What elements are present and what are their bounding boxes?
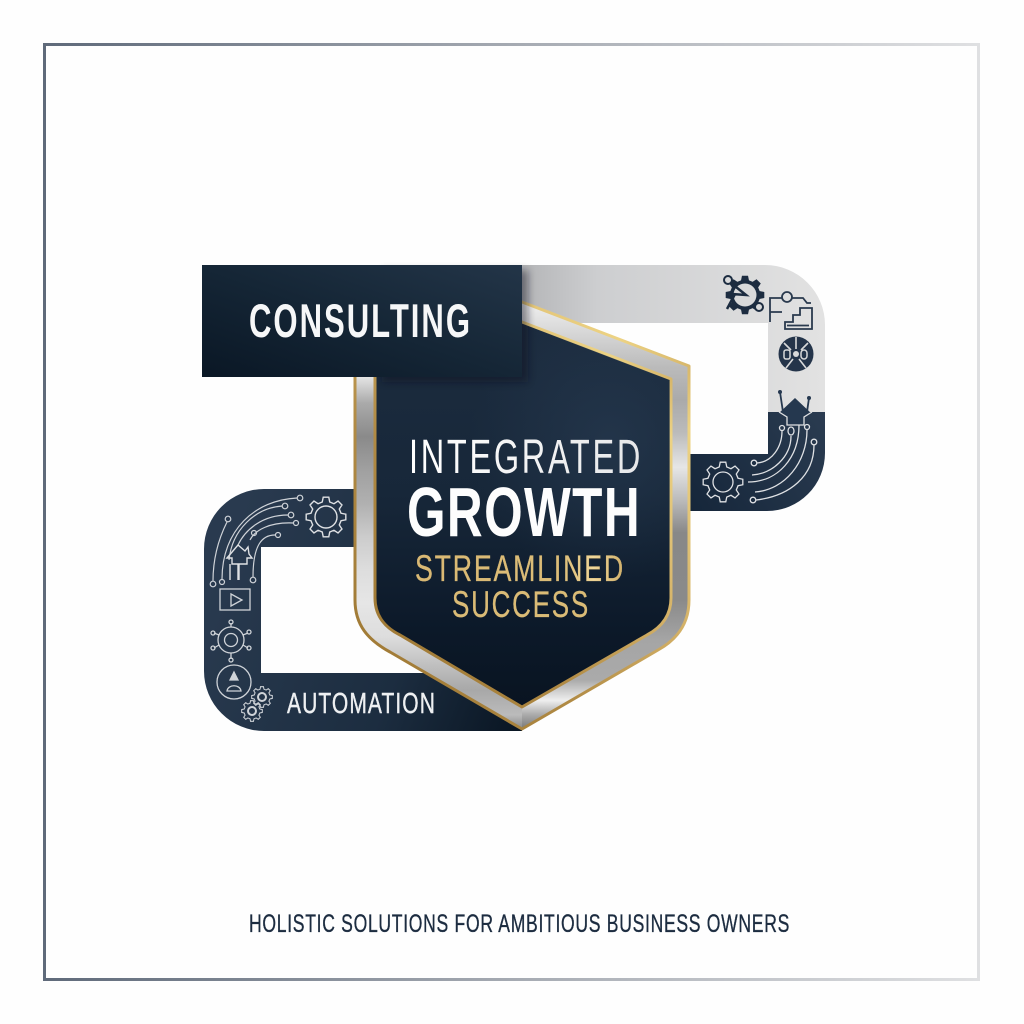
ribbon shape — [204, 489, 522, 731]
shield left silver bevel — [355, 300, 522, 729]
panel: top-right ribbon — [522, 265, 825, 511]
panel: bottom-left ribbon — [204, 489, 522, 731]
panel: consulting box — [202, 265, 528, 382]
icon: small gears — [242, 687, 272, 721]
ribbon section: navy — [680, 412, 825, 511]
shield badge — [355, 300, 689, 729]
icon: outlined gear right — [703, 462, 743, 502]
icon: circuit lines — [748, 424, 817, 503]
icon: growth arrow with circuit pins — [778, 390, 812, 425]
heading: growth: GROWTH — [407, 473, 641, 551]
icon: outlined gear left — [306, 497, 346, 537]
subheading: streamlined: STREAMLINED — [415, 548, 625, 589]
footer tagline: HOLISTIC SOLUTIONS FOR AMBITIOUS BUSINESS OWNERS — [249, 910, 790, 938]
icon: person in circle — [217, 665, 251, 699]
label: consulting: CONSULTING — [249, 294, 472, 347]
icon: dark gear with linked nodes — [724, 276, 764, 314]
icon: dark segmented circle — [778, 336, 814, 372]
subheading: success: SUCCESS — [452, 584, 590, 625]
box — [202, 265, 522, 377]
icon: hub with spokes — [211, 620, 251, 662]
label: automation: AUTOMATION — [287, 688, 436, 720]
heading: integrated: INTEGRATED — [409, 431, 643, 484]
icon: circuit lines left — [210, 495, 303, 587]
shield glow — [376, 321, 670, 706]
box shadow — [382, 270, 528, 382]
icon: house arrow — [227, 545, 252, 580]
shield outer gold rim — [355, 300, 689, 729]
icon: video play box — [220, 589, 250, 610]
shield right silver bevel — [522, 302, 689, 729]
icon: flow chart and stairs — [770, 292, 812, 329]
ribbon section: grey — [522, 265, 825, 412]
shield inner navy face — [375, 320, 671, 707]
